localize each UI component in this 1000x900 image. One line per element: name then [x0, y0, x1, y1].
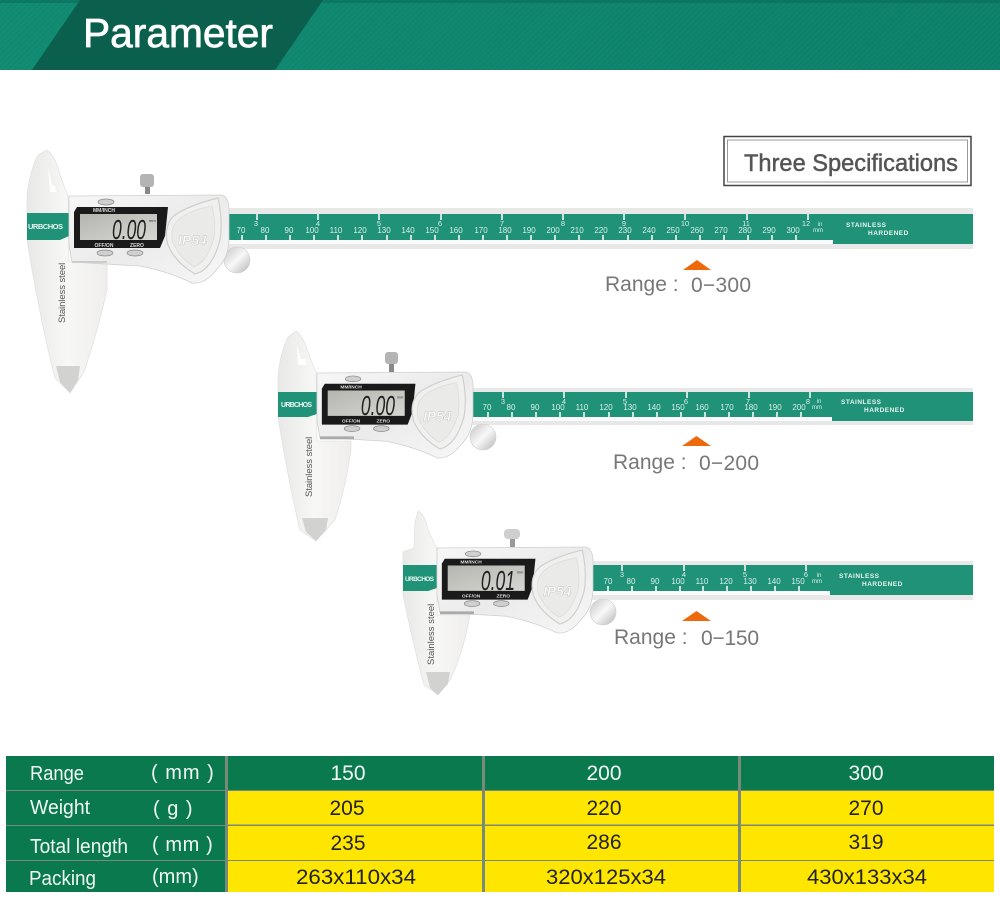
beam 300: STAINLESS [846, 222, 887, 229]
row: total length [6, 826, 994, 860]
display: mm [397, 394, 403, 399]
row: packing: (mm) [152, 866, 199, 888]
slider body 150: MM/INCH [460, 560, 482, 566]
beam 300: 8 [561, 219, 565, 228]
beam 300: 250 [666, 226, 680, 235]
row: packing: 263x110x34 [296, 866, 416, 889]
header banner [0, 0, 1000, 70]
beam 150: mm [812, 579, 822, 585]
beam 200: 5 [623, 397, 627, 406]
row: range [6, 756, 994, 790]
slider body 300: MM/INCH [93, 208, 115, 214]
jaws 200: Stainless steel [304, 436, 315, 497]
caliper 0-150 [403, 511, 973, 695]
beam 200: 100 [551, 403, 565, 412]
row: packing: Packing [29, 868, 96, 890]
leaf badge: IP54 [423, 409, 452, 424]
display: 0.01 [481, 565, 515, 596]
beam 200: 4 [562, 397, 566, 406]
caliper 0-200 [278, 331, 973, 541]
top knob 200 [385, 352, 398, 372]
beam 150: 100 [671, 577, 685, 586]
beam 200: 70 [483, 403, 492, 412]
beam 200: 130 [623, 403, 637, 412]
beam 300: 9 [622, 219, 626, 228]
beam 200: 180 [744, 403, 758, 412]
beam 200: 190 [768, 403, 782, 412]
beam 300: 210 [570, 226, 584, 235]
beam 300: 5 [377, 219, 381, 228]
range label 0-300 [605, 260, 751, 297]
row: total length: 319 [848, 831, 884, 854]
display: OFF/ON [462, 594, 481, 600]
row: packing [6, 861, 994, 892]
beam 300: 280 [738, 226, 752, 235]
beam 300: 11 [742, 219, 750, 228]
beam 200: STAINLESS [841, 399, 882, 406]
beam 200: 8 [806, 397, 810, 406]
display: OFF/ON [342, 419, 361, 425]
display: OFF/ON [95, 243, 114, 249]
top knob 150 [504, 529, 520, 547]
display: 0.00 [112, 214, 146, 245]
beam 300: 190 [522, 226, 536, 235]
beam 300: 240 [642, 226, 656, 235]
beam 300: 270 [714, 226, 728, 235]
beam 150: 70 [604, 577, 613, 586]
thumb wheel 150 [590, 599, 616, 625]
beam 150: 110 [696, 577, 709, 586]
callout: three specifications [724, 136, 971, 186]
beam 200: 80 [507, 403, 516, 412]
beam 300: 4 [316, 219, 320, 228]
row: total length: 286 [586, 831, 622, 854]
range label 0-300: 0−300 [691, 274, 751, 297]
jaws 150: Stainless steel [426, 603, 437, 665]
beam 200: 150 [671, 403, 685, 412]
beam 200: 160 [695, 403, 709, 412]
row: weight: 205 [329, 797, 365, 820]
beam 300: 12 [802, 219, 810, 228]
beam 300: 70 [237, 226, 246, 235]
jaws 150: URBCHOS [405, 576, 435, 583]
beam 200: 90 [531, 403, 540, 412]
beam 150: 150 [791, 577, 805, 586]
beam 300: 160 [449, 226, 463, 235]
jaws 300 [27, 150, 107, 393]
leaf badge [412, 375, 465, 449]
beam 150: 4 [682, 570, 686, 579]
beam 300: 3 [254, 219, 258, 228]
buttons [464, 551, 509, 606]
beam 150: 120 [719, 577, 733, 586]
beam 150: 5 [743, 570, 747, 579]
specification table [6, 756, 994, 892]
beam 150 [590, 561, 973, 600]
jaws 200: URBCHOS [281, 402, 312, 409]
beam 150: in [817, 573, 821, 579]
beam 300: 110 [330, 226, 343, 235]
jaws 300: URBCHOS [28, 222, 63, 231]
beam 150: 80 [627, 577, 636, 586]
beam 150: 130 [743, 577, 757, 586]
leaf badge: IP54 [543, 584, 572, 599]
row: packing: 430x133x34 [807, 866, 927, 889]
beam 200: 140 [647, 403, 661, 412]
row: packing: 320x125x34 [546, 866, 666, 889]
beam 300: 180 [498, 226, 512, 235]
beam 300: 10 [681, 219, 689, 228]
row: weight: 220 [586, 797, 622, 820]
display [74, 207, 168, 249]
row: range: 150 [330, 762, 366, 785]
caliper 0-300 [27, 150, 973, 393]
display: mm [149, 218, 156, 223]
beam 300: in [818, 222, 822, 228]
callout: three specifications: Three Specifications [744, 150, 958, 177]
row: range: ( mm ) [151, 762, 215, 784]
beam 300: 140 [401, 226, 415, 235]
title: Parameter [83, 10, 273, 56]
beam 300: 6 [438, 219, 442, 228]
beam 150: STAINLESS [839, 573, 880, 580]
beam 300: 230 [618, 226, 632, 235]
beam 200: in [817, 399, 821, 405]
beam 300: 130 [377, 226, 391, 235]
beam 200: 7 [746, 397, 750, 406]
range label 0-300: Range : [605, 273, 679, 296]
beam 200 [470, 388, 973, 425]
range label 0-200: 0−200 [699, 452, 759, 475]
beam 300: 100 [305, 226, 319, 235]
beam 300: HARDENED [868, 230, 909, 237]
slider body 150 [437, 547, 593, 633]
range label 0-150: Range : [614, 626, 688, 649]
range label 0-200: Range : [613, 451, 687, 474]
row: range: 300 [848, 762, 884, 785]
beam 300: 260 [690, 226, 704, 235]
buttons [97, 199, 143, 256]
beam 300: 150 [425, 226, 439, 235]
buttons [344, 376, 389, 432]
beam 300: 90 [285, 226, 294, 235]
display: ZERO [130, 243, 144, 249]
beam 300: 7 [500, 219, 504, 228]
beam 200: mm [812, 405, 822, 411]
beam 200: 120 [599, 403, 613, 412]
beam 300: 120 [353, 226, 367, 235]
beam 200: 200 [792, 403, 806, 412]
jaws 150 [403, 511, 470, 695]
slider body 200: MM/INCH [340, 385, 362, 391]
display: 0.00 [361, 390, 395, 421]
row: weight: 270 [848, 797, 884, 820]
row: weight [6, 791, 994, 825]
beam 300 [225, 208, 973, 249]
beam 300: 200 [546, 226, 560, 235]
beam 300: 220 [594, 226, 608, 235]
beam 200: 3 [501, 397, 505, 406]
beam 300: 80 [261, 226, 270, 235]
beam 150: 6 [804, 570, 808, 579]
display: ZERO [497, 594, 510, 600]
range label 0-150 [614, 611, 759, 650]
beam 300: 290 [762, 226, 776, 235]
display: mm [517, 569, 523, 574]
beam 300: 300 [786, 226, 800, 235]
beam 200: 170 [720, 403, 734, 412]
beam 300: mm [813, 228, 823, 234]
beam 200: 110 [576, 403, 589, 412]
jaws 200 [278, 331, 351, 541]
beam 200: HARDENED [864, 407, 905, 414]
top knob 300 [140, 174, 154, 194]
leaf badge [532, 550, 585, 624]
beam 300: 170 [474, 226, 488, 235]
beam 150: 140 [767, 577, 781, 586]
slider body 300 [69, 195, 229, 283]
row: range: Range [30, 763, 84, 785]
range label 0-150: 0−150 [701, 627, 759, 650]
range label 0-200 [613, 436, 759, 475]
thumb wheel 200 [470, 424, 496, 450]
leaf badge [167, 198, 221, 274]
beam 200: 6 [684, 397, 688, 406]
row: weight: ( g ) [153, 798, 194, 820]
beam 150: 3 [620, 570, 624, 579]
row: total length: 235 [330, 832, 366, 855]
leaf badge: IP54 [178, 232, 207, 248]
row: total length: ( mm ) [152, 834, 213, 856]
jaws 300: Stainless steel [57, 262, 68, 323]
display: ZERO [377, 419, 390, 425]
row: weight: Weight [30, 797, 90, 819]
slider body 200 [317, 372, 473, 458]
beam 150: HARDENED [862, 581, 903, 588]
row: total length: Total length [30, 836, 128, 858]
beam 150: 90 [651, 577, 660, 586]
display [322, 384, 415, 425]
display [442, 559, 535, 600]
row: range: 200 [586, 762, 622, 785]
thumb wheel 300 [224, 247, 250, 273]
